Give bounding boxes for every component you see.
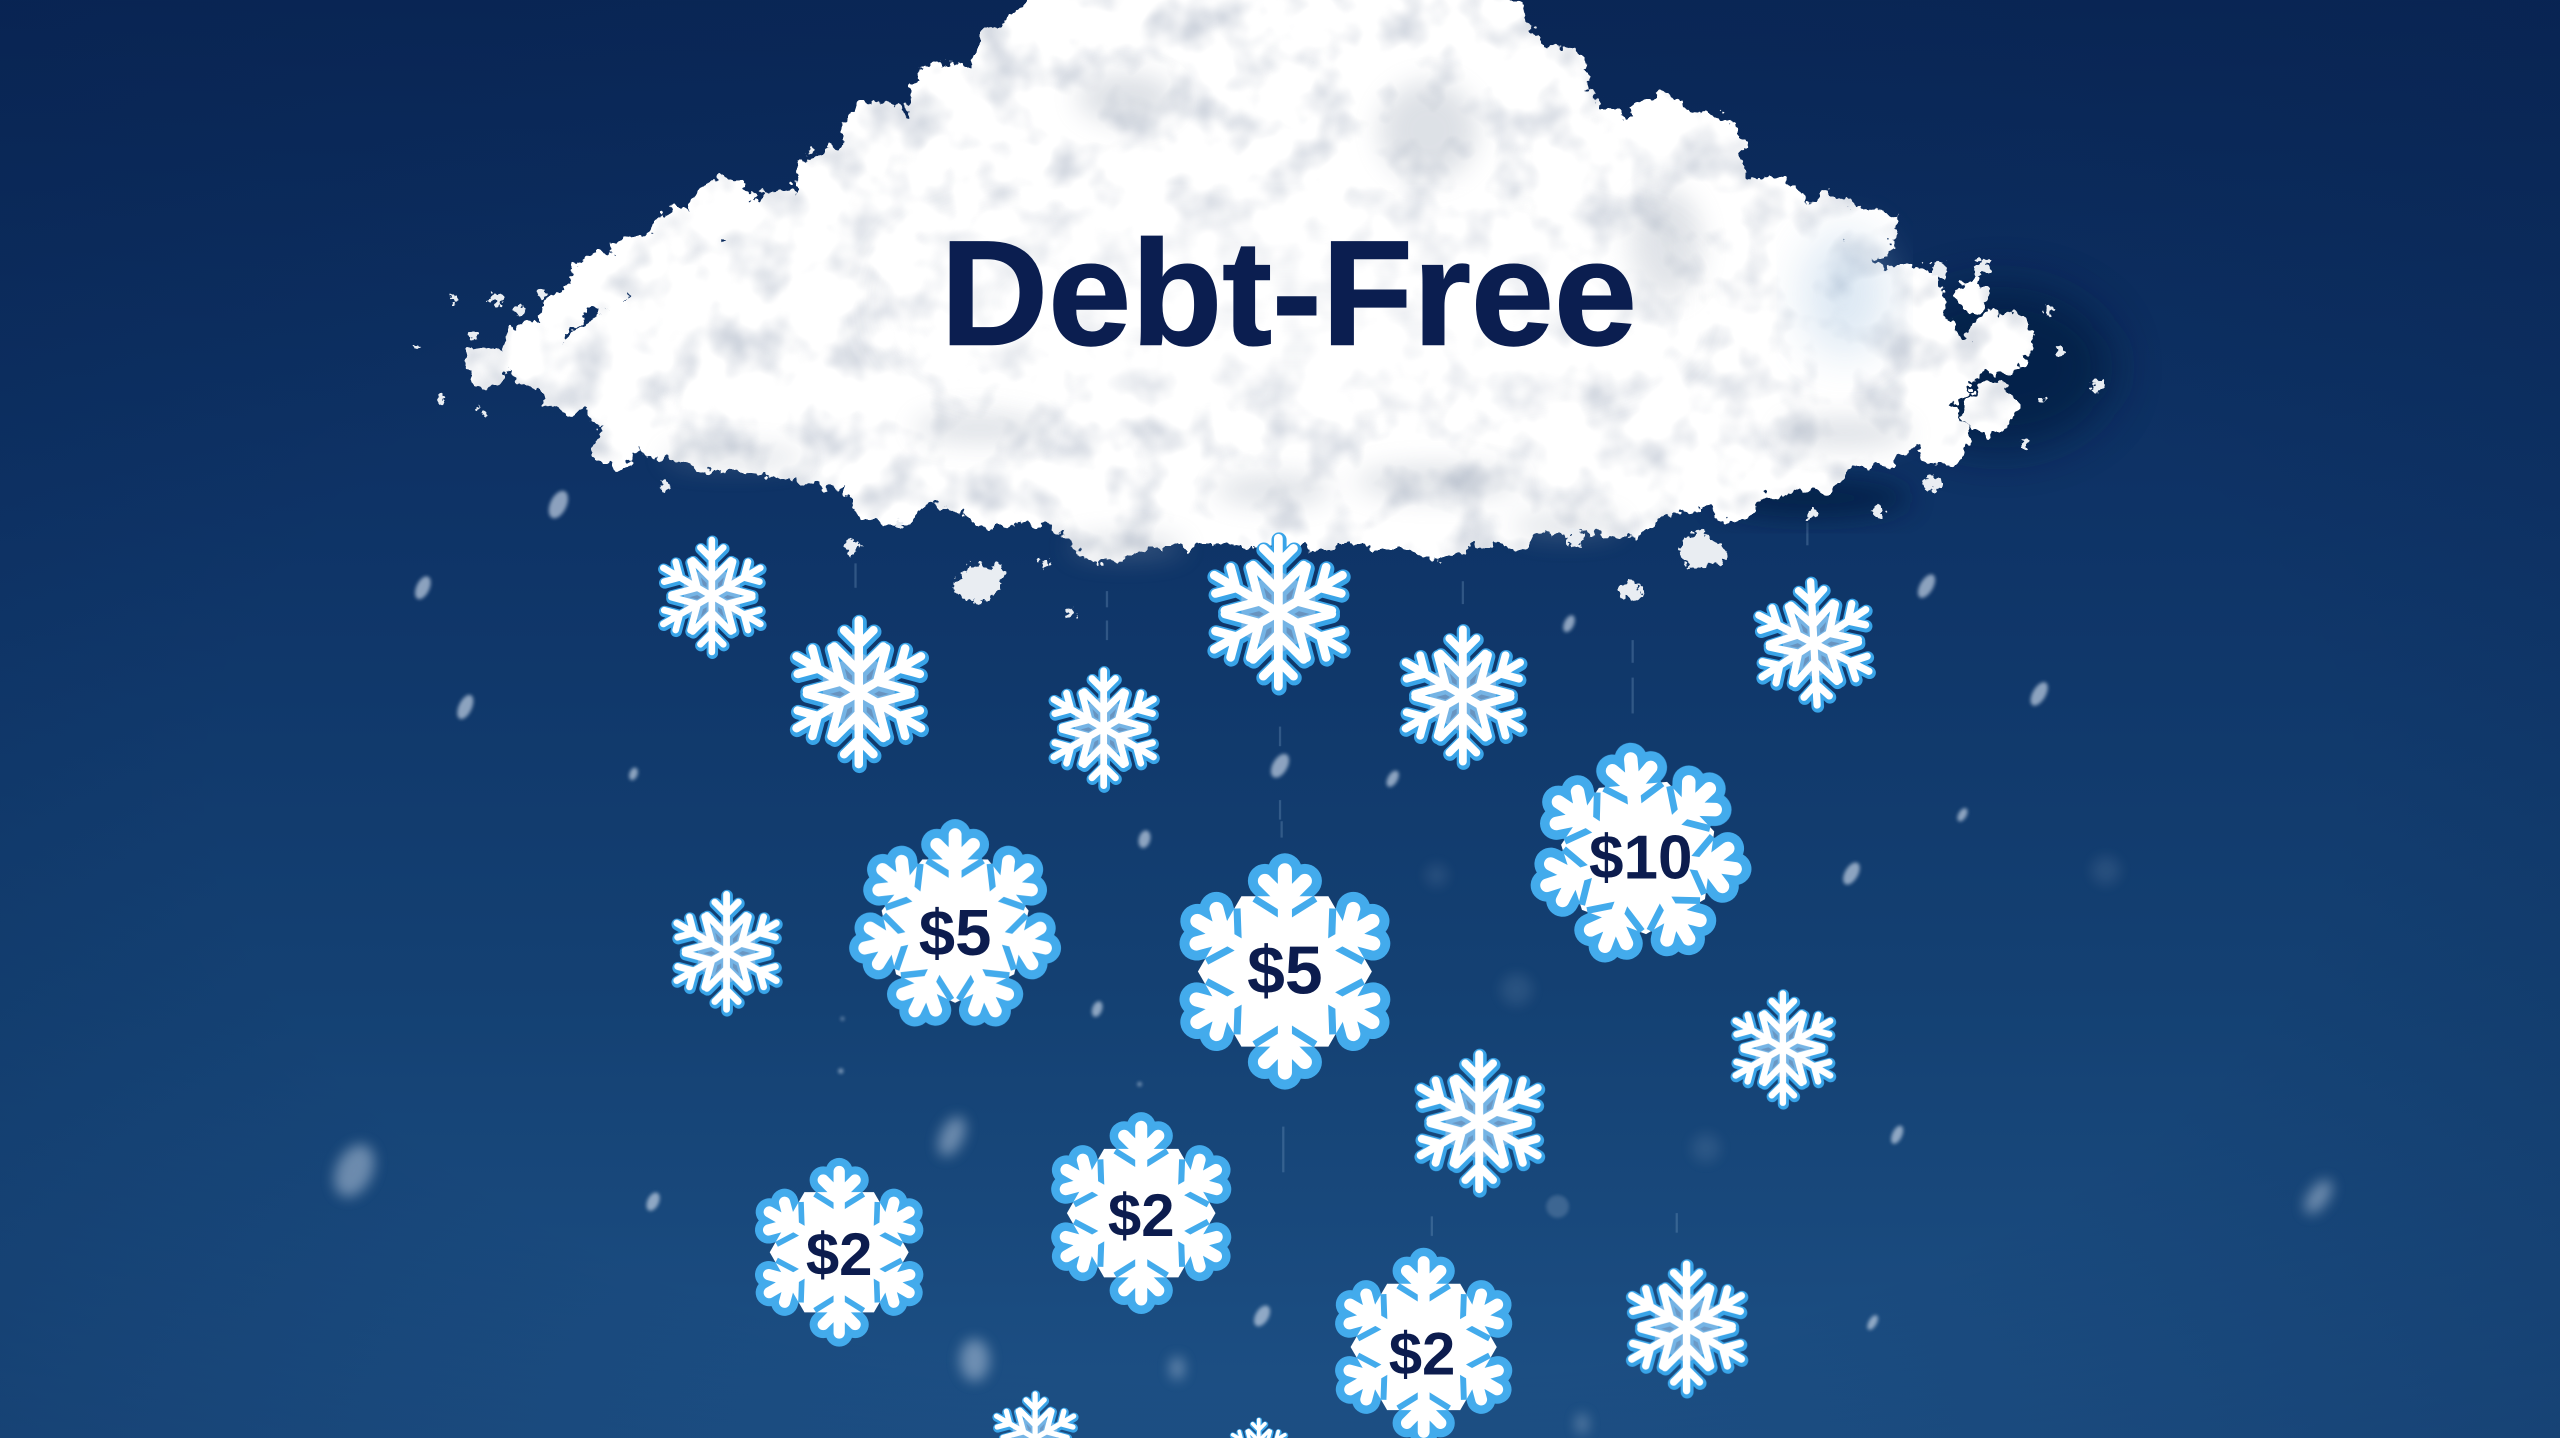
dollar snowflake: $5 left <box>859 835 1052 1023</box>
dollar snowflake: $5 left: $5 <box>919 896 991 969</box>
snowflake 1 <box>654 540 770 653</box>
snowflake 8 <box>1726 994 1840 1104</box>
snow pile <box>465 0 2033 563</box>
snowflake 10 <box>1621 1264 1753 1392</box>
snowflake 12 <box>1228 1420 1290 1438</box>
dollar snowflake: $2 left: $2 <box>806 1221 873 1288</box>
dollar snowflake: $2 middle: $2 <box>1108 1182 1175 1249</box>
faint vertical trails <box>856 522 1807 1236</box>
snowflake 4 <box>1202 538 1356 688</box>
dollar snowflake: $2 middle <box>1053 1127 1229 1299</box>
soft shadow around snow pile <box>1714 286 2114 518</box>
snowflake 6 <box>1747 578 1882 710</box>
dollar snowflake: $10 <box>1530 750 1748 964</box>
dollar snowflake: $5 centre: $5 <box>1247 933 1323 1008</box>
snow pile shading <box>663 73 1910 558</box>
snowflake 5 <box>1394 629 1532 763</box>
snowflake 3 <box>1044 671 1164 787</box>
falling snow particles <box>326 488 2338 1433</box>
snowflake 9 <box>1409 1054 1550 1191</box>
dollar snowflake: $5 centre <box>1182 870 1388 1073</box>
dollar snowflake: $10: $10 <box>1589 823 1693 892</box>
snowflake 7 <box>667 894 787 1011</box>
dollar snowflake: $2 left <box>757 1172 921 1333</box>
snowflake 2 <box>784 620 934 766</box>
plain snowflakes <box>654 538 1882 1438</box>
dollar snowflake: $2 right <box>1337 1262 1510 1432</box>
loose snow clumps and crumbs <box>413 258 2103 616</box>
title: Debt-Free: Debt-Free <box>940 210 1637 377</box>
dollar snowflake: $2 right: $2 <box>1389 1321 1455 1388</box>
snowflake 11 <box>989 1394 1082 1438</box>
